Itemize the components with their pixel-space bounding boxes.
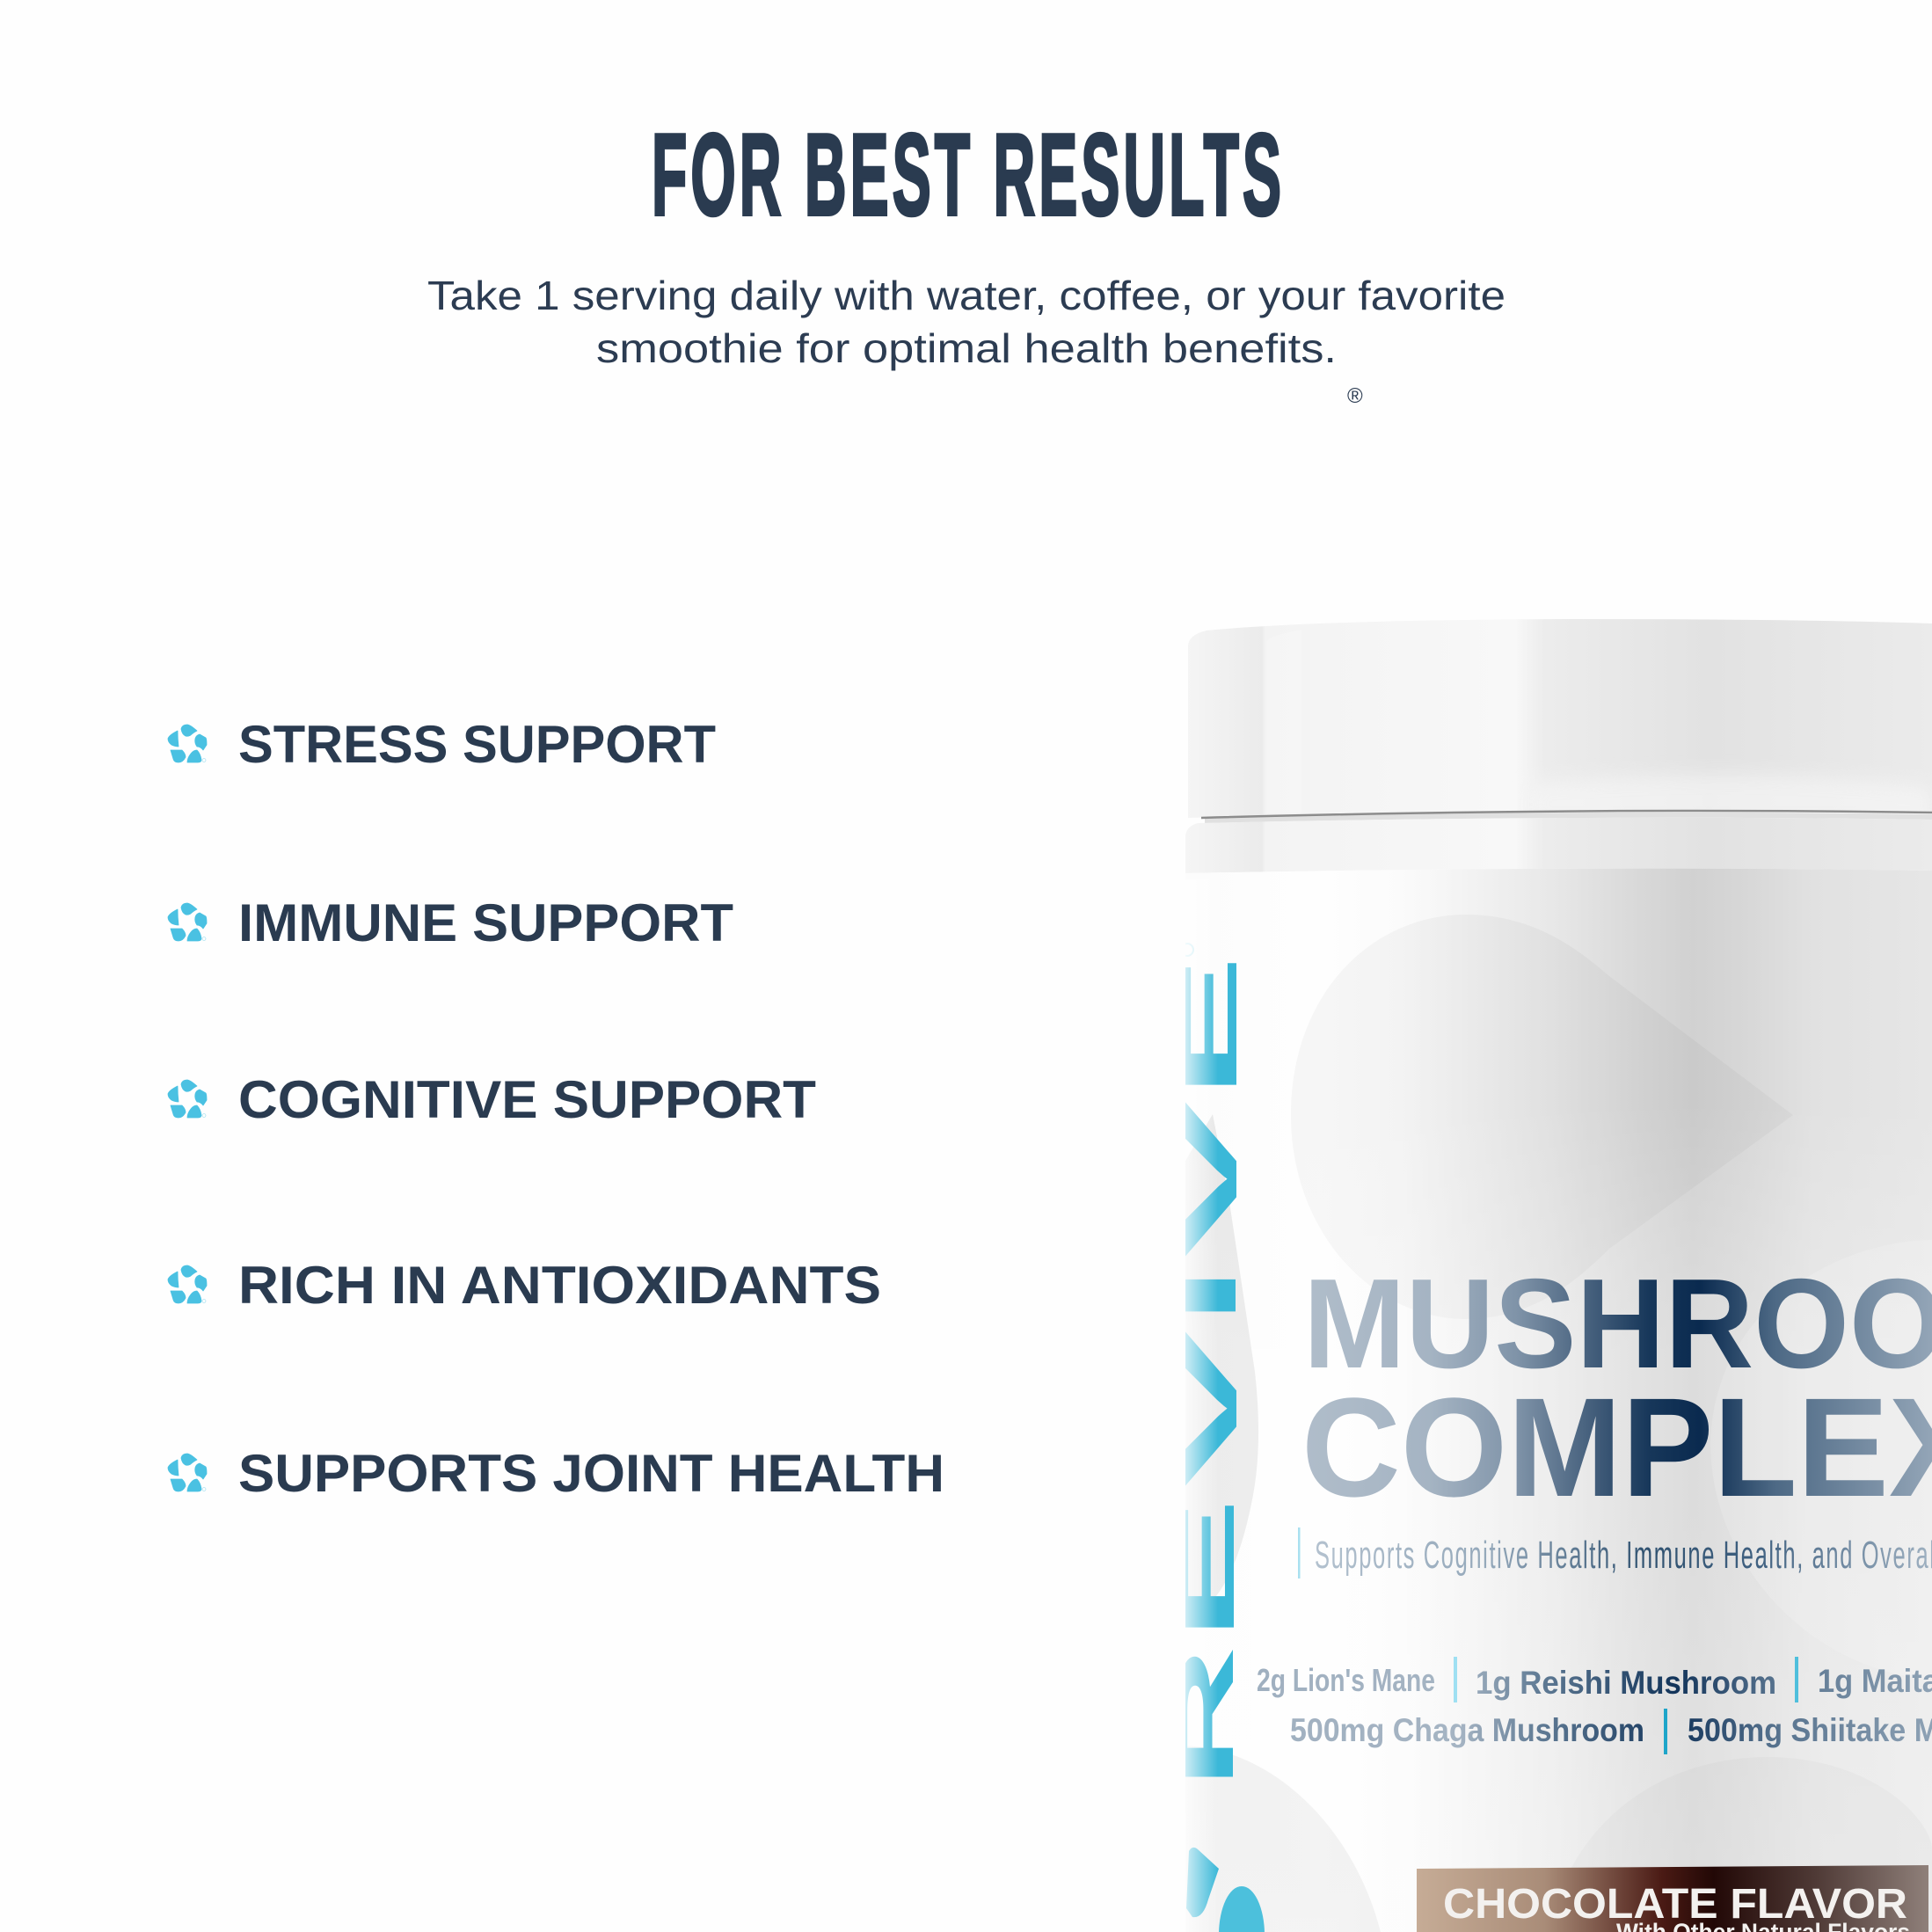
registered mark on wordmark [1185,943,1194,957]
benefits list [168,715,944,1503]
benefit: rich in antioxidants: RICH IN ANTIOXIDANTS [238,1256,881,1315]
ingredient list: 500mg Chaga Mushroom [1290,1712,1644,1748]
intro text: Take 1 serving daily with water, coffee, or your favorite [427,273,1506,318]
label edge highlight [1185,943,1216,1932]
jar label artwork [1185,943,1932,1932]
benefit: stress support: STRESS SUPPORT [238,715,716,774]
brand wordmark: V [1165,1326,1253,1491]
tagline: Supports Cognitive Health, Immune Health, and Overall [1315,1533,1932,1577]
teardrop watermark [1291,915,1793,1319]
watermark beside logo [1191,1115,1258,1596]
brand wordmark: I [1164,1265,1252,1326]
ingredient list: 1g Reishi Mushroom [1476,1665,1776,1701]
jar lid [1188,619,1932,827]
benefit: cognitive support: COGNITIVE SUPPORT [238,1070,816,1129]
brand wordmark: V [1165,1097,1253,1262]
watermark right blob [1710,1240,1932,1680]
watermark lower circle [1548,1757,1932,1932]
brand wordmark: E [1165,955,1253,1099]
ingredient list [1257,1657,1932,1754]
jar seam [1201,811,1932,820]
benefit: immune support: IMMUNE SUPPORT [238,893,733,952]
jar neck band and label base [1185,818,1932,1932]
ingredient list: 2g Lion's Mane [1257,1662,1435,1698]
watermark lower left [1204,1755,1381,1932]
brand wordmark: R [1161,1645,1250,1790]
brand wordmark: E [1163,1498,1250,1642]
benefit: supports joint health: SUPPORTS JOINT HEALTH [238,1444,944,1503]
brand wordmark [1185,963,1236,1776]
registered mark: ® [1347,384,1363,408]
flavor banner [1417,1865,1928,1932]
flavor banner: CHOCOLATE FLAVOR [1443,1881,1907,1928]
product name [1301,1252,1932,1526]
product jar [1161,619,1932,1932]
label lighting [1546,1294,1932,1932]
brand logo drops [1186,1848,1265,1932]
title: FOR BEST RESULTS [652,111,1281,240]
intro text [427,273,1506,371]
intro text: smoothie for optimal health benefits. [596,325,1337,371]
